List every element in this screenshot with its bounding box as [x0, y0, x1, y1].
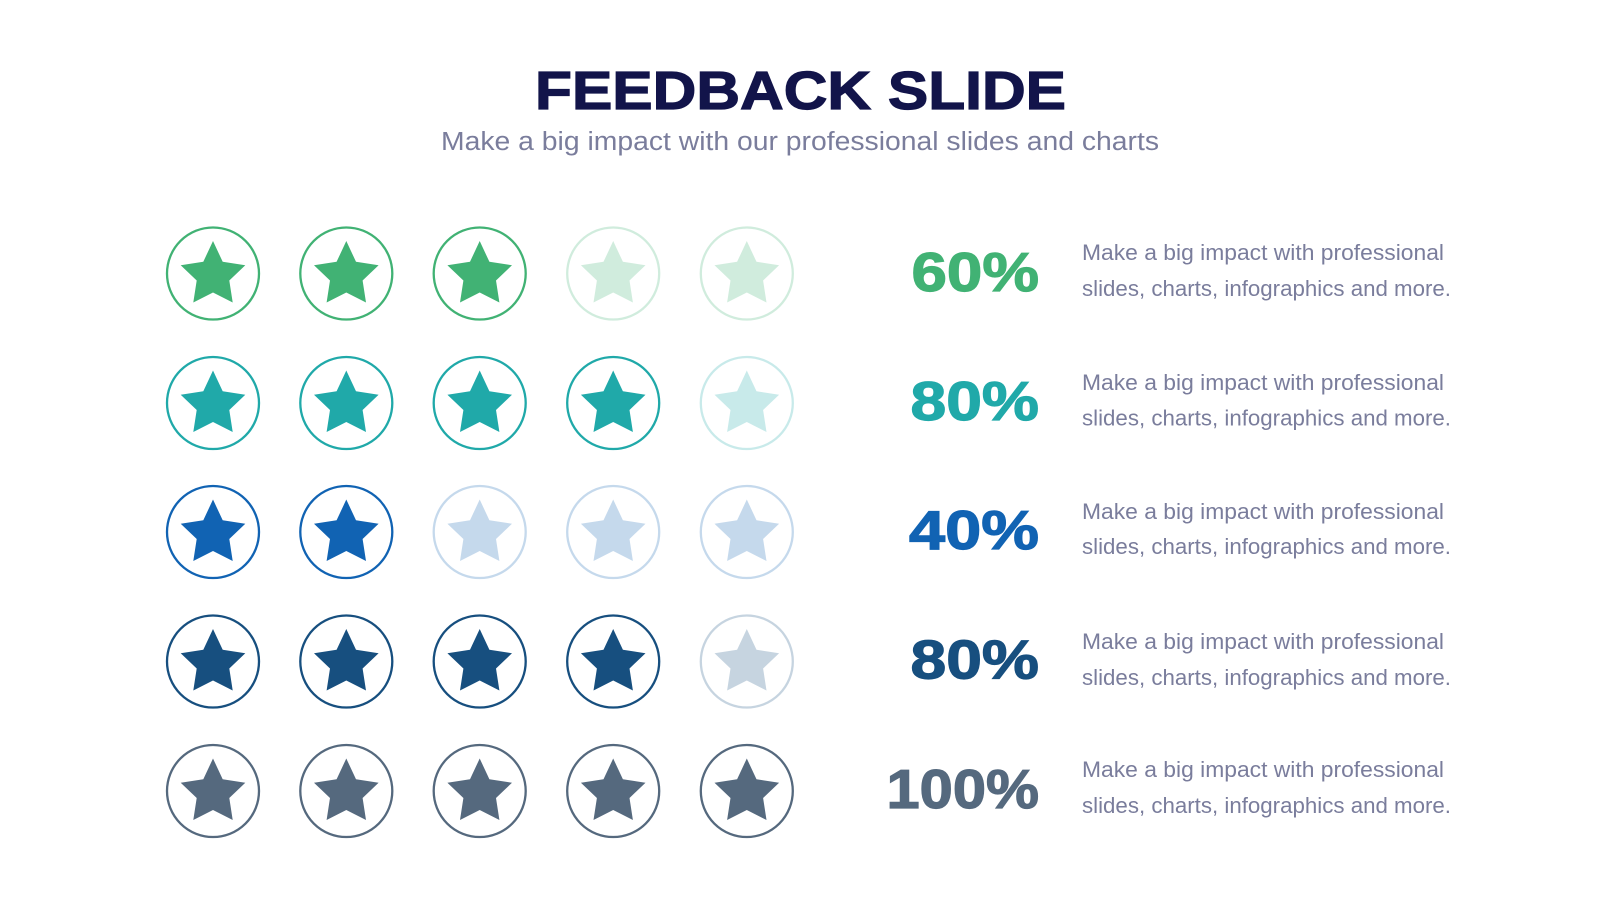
icon: filled star 5 [701, 745, 793, 837]
icon: filled star 2 [300, 357, 392, 449]
icon: faded star 5 [701, 486, 793, 578]
percentage 80%: 80% [910, 370, 1039, 432]
percentage 80%: 80% [910, 628, 1039, 690]
icon: filled star 2 [300, 745, 392, 837]
description line 2: slides, charts, infographics and more. [1082, 276, 1451, 301]
icon: faded star 5 [701, 616, 793, 708]
percentage 60%: 60% [912, 241, 1039, 303]
description line 2: slides, charts, infographics and more. [1082, 534, 1451, 559]
row 1: 60% rating [167, 228, 1451, 320]
icon: faded star 4 [567, 228, 659, 320]
icon: filled star 3 [434, 745, 526, 837]
icon: filled star 1 [167, 486, 259, 578]
icon: filled star 1 [167, 228, 259, 320]
icon: filled star 1 [167, 745, 259, 837]
icon: filled star 1 [167, 616, 259, 708]
description line 2: slides, charts, infographics and more. [1082, 793, 1451, 818]
icon: faded star 5 [701, 228, 793, 320]
icon: faded star 3 [434, 486, 526, 578]
icon: filled star 2 [300, 228, 392, 320]
icon: filled star 4 [567, 745, 659, 837]
icon: faded star 5 [701, 357, 793, 449]
row 3: 40% rating [167, 486, 1451, 578]
description: Make a big impact with professional [1082, 240, 1444, 265]
icon: faded star 4 [567, 486, 659, 578]
description: Make a big impact with professional [1082, 370, 1444, 395]
percentage 40%: 40% [909, 499, 1039, 561]
icon: filled star 1 [167, 357, 259, 449]
icon: filled star 4 [567, 616, 659, 708]
subtitle: Make a big impact with our professional slides and charts [441, 128, 1159, 156]
icon: filled star 3 [434, 357, 526, 449]
description line 2: slides, charts, infographics and more. [1082, 665, 1451, 690]
icon: filled star 2 [300, 616, 392, 708]
description: Make a big impact with professional [1082, 629, 1444, 654]
row 5: 100% rating [167, 745, 1451, 837]
description line 2: slides, charts, infographics and more. [1082, 406, 1451, 430]
description: Make a big impact with professional [1082, 499, 1444, 524]
icon: filled star 2 [300, 486, 392, 578]
description: Make a big impact with professional [1082, 757, 1444, 782]
title: FEEDBACK SLIDE [535, 61, 1066, 121]
icon: filled star 4 [567, 357, 659, 449]
row 4: 80% rating [167, 616, 1451, 708]
icon: filled star 3 [434, 228, 526, 320]
percentage 100%: 100% [886, 758, 1039, 820]
icon: filled star 3 [434, 616, 526, 708]
row 2: 80% rating [167, 357, 1451, 449]
